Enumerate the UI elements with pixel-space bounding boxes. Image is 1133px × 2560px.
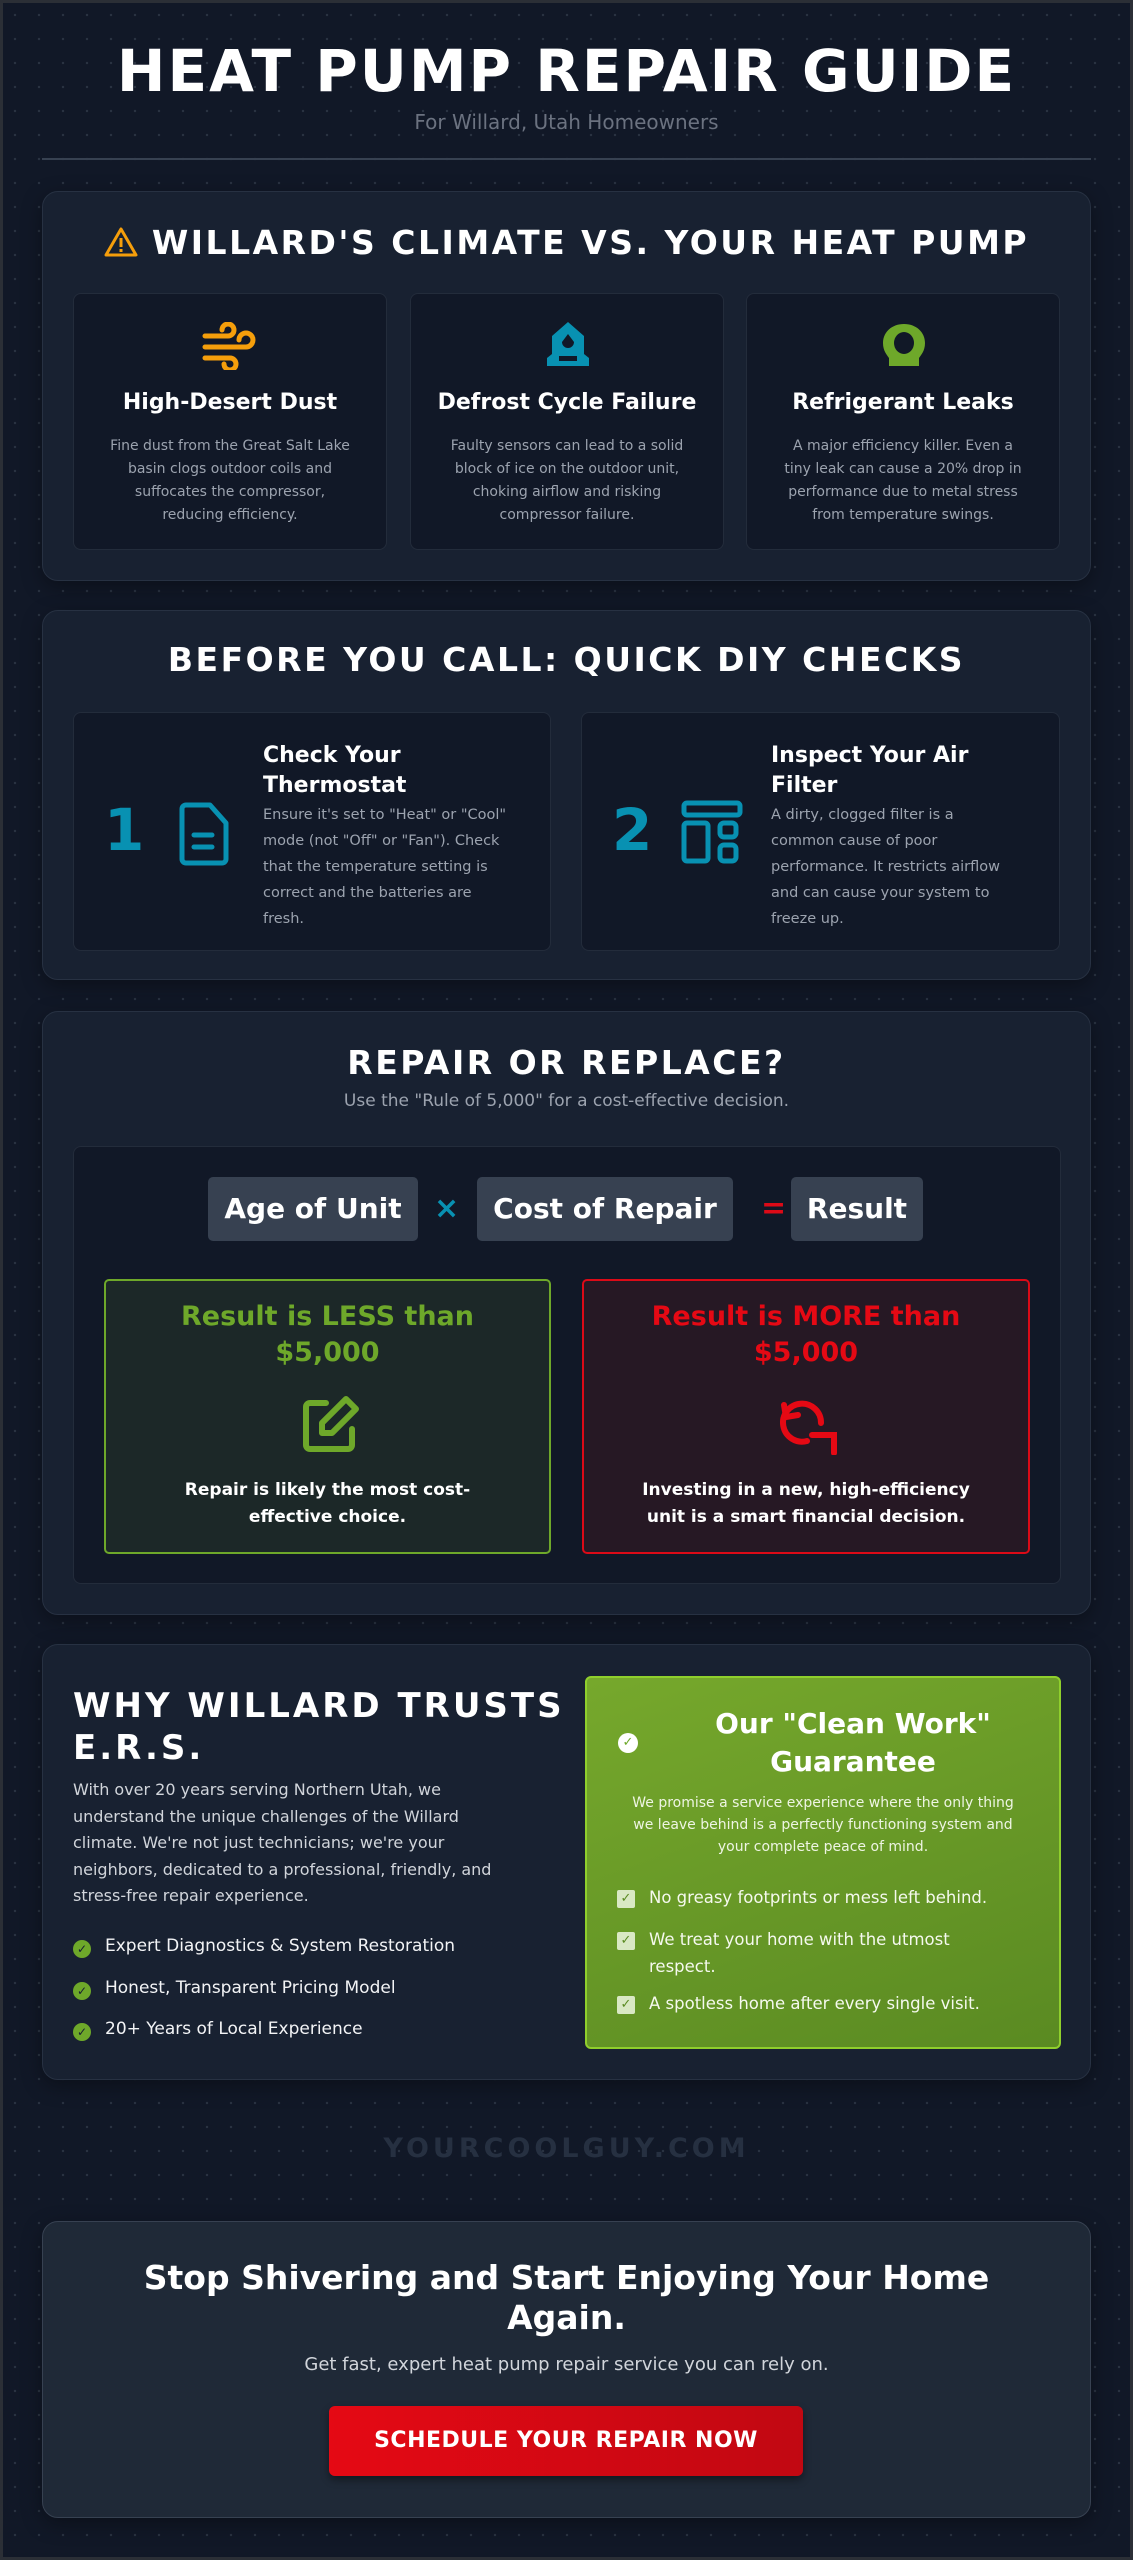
text: filter: and can cause your system to	[771, 885, 989, 901]
text: thermostat: that the temperature setting is	[263, 859, 488, 875]
formula	[208, 1177, 923, 1241]
text: filter: Filter	[771, 773, 837, 798]
card: defrost: compressor failure.	[500, 507, 634, 523]
box: guarantee: No greasy footprints or mess left behind.	[649, 1888, 987, 1907]
text: filter: freeze up.	[771, 911, 844, 927]
text: about: stress-free repair experience.	[73, 1886, 309, 1905]
box: less than: $5,000	[275, 1337, 380, 1368]
number 2: 2	[612, 796, 652, 864]
box: less than: Repair is likely the most cost-	[185, 1480, 470, 1500]
heading: repair or replace: REPAIR OR REPLACE?	[347, 1043, 786, 1082]
icon: defrost	[547, 322, 589, 366]
heading: climate: WILLARD'S CLIMATE VS. YOUR HEAT PUMP	[152, 223, 1029, 262]
box: guarantee: your complete peace of mind.	[718, 1839, 928, 1855]
text: thermostat	[263, 743, 506, 927]
card: defrost: choking airflow and risking	[473, 484, 661, 500]
formula: Result	[807, 1192, 907, 1225]
text: about	[73, 1780, 491, 1905]
formula: Age of Unit	[224, 1192, 402, 1225]
text: thermostat: Thermostat	[263, 773, 406, 798]
box: guarantee: ✓	[621, 1891, 631, 1906]
text: about: neighbors, dedicated to a professional, friendly, and	[73, 1860, 491, 1878]
watermark: YOURCOOLGUY.COM	[383, 2133, 750, 2164]
card: defrost	[410, 293, 724, 550]
icon: check: ✓	[623, 1735, 633, 1750]
box: less than: Result is LESS than	[181, 1301, 474, 1332]
CTA heading	[144, 2258, 989, 2337]
box: guarantee: Guarantee	[770, 1745, 936, 1778]
card: leaks: performance due to metal stress	[788, 484, 1018, 500]
card: leaks: from temperature swings.	[812, 507, 994, 523]
box: guarantee: ✓	[621, 1933, 631, 1948]
card: filter	[581, 712, 1060, 951]
box: guarantee: We treat your home with the utmost	[649, 1930, 950, 1949]
card: dust: basin clogs outdoor coils and	[128, 461, 332, 477]
heading: why trust	[73, 1686, 565, 1768]
formula: Cost of Repair	[493, 1192, 717, 1225]
text: about: With over 20 years serving Northern Utah, we	[73, 1780, 441, 1799]
CTA heading: Again.	[507, 2298, 626, 2337]
box: guarantee: We promise a service experience where the only thing	[632, 1795, 1014, 1811]
text: thermostat: fresh.	[263, 911, 304, 927]
card: leaks	[746, 293, 1060, 550]
text: thermostat: Check Your	[263, 743, 401, 768]
heading: why trust: WHY WILLARD TRUSTS	[73, 1686, 565, 1726]
card: defrost: Faulty sensors can lead to a solid	[451, 438, 683, 454]
list: benefits: ✓	[77, 2025, 87, 2039]
text: filter	[771, 743, 1000, 927]
icon: wind	[202, 322, 256, 370]
icon: edit	[303, 1396, 359, 1452]
icon: check	[618, 1733, 638, 1753]
text: thermostat: mode (not "Off" or "Fan"). Check	[263, 833, 499, 849]
panel: DIY checks	[42, 610, 1091, 980]
list: benefits: ✓	[77, 1942, 87, 1956]
box: more than	[582, 1279, 1030, 1554]
box: guarantee: respect.	[649, 1957, 716, 1976]
card: leaks: tiny leak can cause a 20% drop in	[784, 461, 1022, 477]
list: benefits: Honest, Transparent Pricing Model	[105, 1978, 396, 1998]
text: filter: common cause of poor	[771, 833, 937, 849]
subtitle: For Willard, Utah Homeowners	[414, 110, 719, 134]
button: schedule: SCHEDULE YOUR REPAIR NOW	[374, 2428, 758, 2453]
box: more than: $5,000	[754, 1337, 858, 1368]
text: filter: A dirty, clogged filter is a	[771, 807, 954, 823]
card: defrost: Defrost Cycle Failure	[438, 390, 696, 415]
box: guarantee	[585, 1676, 1061, 2049]
card: leaks: A major efficiency killer. Even a	[793, 438, 1013, 454]
text: thermostat: correct and the batteries are	[263, 885, 472, 901]
panel: why trust	[42, 1644, 1091, 2080]
box: guarantee: we leave behind is a perfectly functioning system and	[633, 1817, 1013, 1833]
title: HEAT PUMP REPAIR GUIDE	[117, 37, 1016, 105]
panel: call to action	[42, 2221, 1091, 2518]
text: about: climate. We're not just technicians; we're your	[73, 1833, 444, 1852]
card: dust: High-Desert Dust	[123, 390, 337, 415]
card: dust	[73, 293, 387, 550]
heading: DIY: BEFORE YOU CALL: QUICK DIY CHECKS	[168, 640, 965, 679]
CTA subtext: Get fast, expert heat pump repair service you can rely on.	[304, 2354, 829, 2375]
list: benefits: 20+ Years of Local Experience	[105, 2019, 363, 2039]
panel: repair or replace	[42, 1011, 1091, 1615]
box: more than: unit is a smart financial decision.	[647, 1507, 965, 1527]
icon: filter	[682, 800, 742, 864]
card: leaks: Refrigerant Leaks	[792, 390, 1014, 415]
subheading: Use the "Rule of 5,000" for a cost-effective decision.	[344, 1091, 789, 1111]
list: benefits	[73, 1936, 455, 2041]
box: guarantee: A spotless home after every single visit.	[649, 1994, 980, 2013]
box: guarantee: ✓	[621, 1997, 631, 2012]
list: benefits: ✓	[77, 1984, 87, 1998]
text: thermostat: Ensure it's set to "Heat" or "Cool"	[263, 807, 506, 823]
button: schedule	[329, 2406, 803, 2476]
text: filter: performance. It restricts airflow	[771, 859, 1000, 875]
icon: ring	[883, 324, 925, 366]
text: filter: Inspect Your Air	[771, 743, 968, 768]
box: less than	[104, 1279, 551, 1554]
icon: document	[180, 802, 228, 866]
heading: why trust: E.R.S.	[73, 1728, 204, 1768]
icon: replace	[780, 1400, 837, 1455]
formula: ×	[434, 1191, 459, 1226]
formula: =	[761, 1191, 786, 1226]
card: dust: reducing efficiency.	[162, 507, 298, 523]
card: dust: Fine dust from the Great Salt Lake	[110, 438, 350, 454]
card: thermostat	[73, 712, 551, 951]
panel: climate	[42, 191, 1091, 581]
box: more than: Investing in a new, high-efficiency	[642, 1480, 970, 1500]
list: benefits: Expert Diagnostics & System Restoration	[105, 1936, 455, 1956]
card: defrost: block of ice on the outdoor unit,	[455, 461, 679, 477]
text: about: understand the unique challenges of the Willard	[73, 1806, 459, 1826]
box: less than: effective choice.	[249, 1507, 406, 1527]
box: formula	[73, 1146, 1061, 1584]
CTA heading: Stop Shivering and Start Enjoying Your Home	[144, 2258, 989, 2297]
box: more than: Result is MORE than	[652, 1301, 960, 1332]
box: guarantee: Our "Clean Work"	[715, 1707, 991, 1740]
card: dust: suffocates the compressor,	[135, 484, 325, 500]
number 1: 1	[104, 796, 144, 864]
